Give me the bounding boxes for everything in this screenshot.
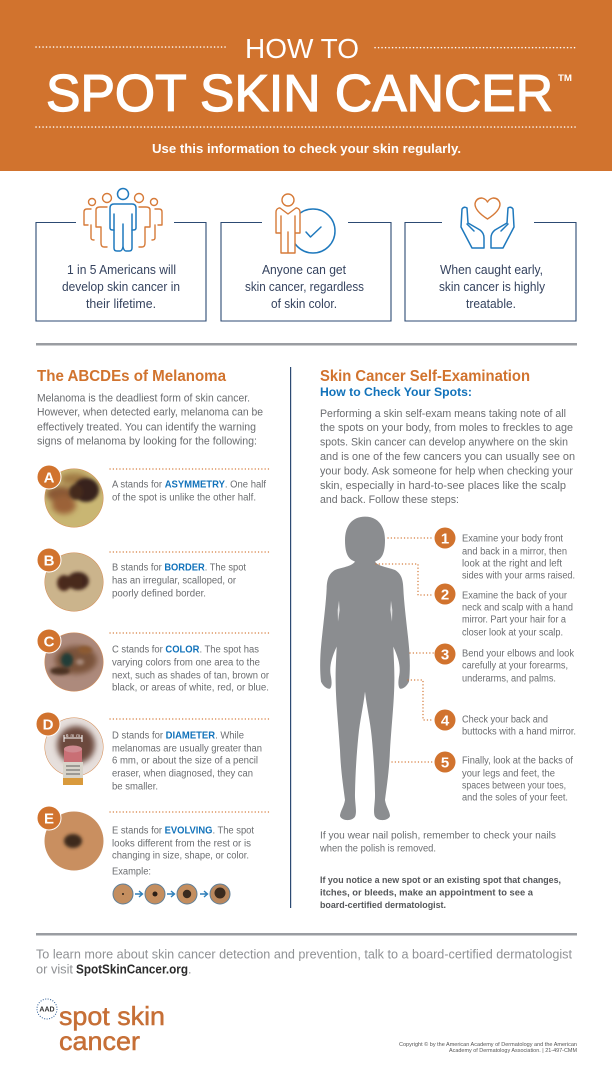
text: learn more: or visit [36,962,74,976]
step 5 [434,752,573,804]
text: stat: their lifetime. [86,297,156,311]
item: E evolving: Example: [112,866,151,878]
badge A [37,465,61,489]
logo: spot skin cancer: spot skin [59,1001,165,1031]
text: evolving: E stands for EVOLVING. The spot [112,826,254,836]
icon: AAD seal: AAD [39,1006,55,1014]
text: nail polish note [319,830,556,854]
photo: mole with pencil eraser: 6mm [66,733,80,738]
badge 1 [434,528,456,548]
text: see a dermatologist: itches, or bleeds, make an appointment to see a [320,888,534,898]
text: stat [62,263,180,311]
step 2: neck and scalp with a hand [462,602,573,614]
item: E evolving [37,806,270,904]
item: D diameter: be smaller. [112,782,158,792]
evolution sequence [113,884,230,904]
text: learn more [36,948,573,976]
figure: body silhouette [320,517,410,820]
step 3: underarms, and palms. [462,674,556,684]
item: E evolving: looks different from the rest or is [112,838,251,850]
text: self-exam intro: the spots on your body, from moles to freckles to age [320,422,573,434]
text: self-exam intro: and is one of the few cancers you can usually see on [320,451,575,463]
item: D diameter: eraser, when diagnosed, they can [112,768,253,780]
step 4: Check your back and [462,714,548,726]
item: C color: black, or areas of white, red, or blue. [112,682,269,694]
step 5: Finally, look at the backs of [462,756,573,766]
text: melanoma intro: effectively treated. You can identify the warning [37,422,256,434]
title: spot skin cancer: SPOT SKIN CANCER [46,65,553,123]
badge D: D [43,716,54,734]
badge 4: 4 [441,712,450,730]
badge 3: 3 [441,646,449,664]
text: nail polish note: when the polish is removed. [319,844,436,854]
text: learn more: . [188,962,191,976]
step 1 [434,528,575,582]
text: treatable [439,263,546,311]
text: learn more: To learn more about skin cancer detection and prevention, talk to a board-certified dermatologist [36,948,573,962]
text: treatable: When caught early, [440,263,543,277]
step 2: closer look at your scalp. [462,628,563,638]
heading: ABCDEs of Melanoma: The ABCDEs of Melanoma [37,368,226,385]
text: copyright: Copyright © by the American Academy of Dermatology and the American [399,1041,577,1048]
photo: mole with pencil eraser [44,717,104,785]
text: treatable: treatable. [466,297,516,311]
text: self-exam intro: skin, especially in hard-to-see places like the scalp [320,480,566,492]
text: see a dermatologist: If you notice a new spot or an existing spot that changes, [320,875,561,885]
heading: self-examination: Skin Cancer Self-Examination [320,368,530,385]
icon: person with check circle [276,194,335,253]
text: copyright [399,1041,577,1054]
subtitle: Use this information to check your skin regularly. [152,142,461,156]
item: B border: has an irregular, scalloped, or [112,576,237,586]
step 1: Examine your body front [462,534,563,544]
step 5: your legs and feet, the [462,768,555,780]
step 1: and back in a mirror, then [462,546,567,558]
item: C color: varying colors from one area to the [112,658,260,668]
step 2: mirror. Part your hair for a [462,614,566,626]
text: stat: 1 in 5 Americans will [67,263,176,277]
panel: anyone can get skin cancer [221,194,391,321]
step 2 [434,584,573,638]
text: statement [245,263,364,311]
text: stat: develop skin cancer in [62,280,180,294]
item: D diameter: melanomas are usually greater than [112,744,262,754]
step 3 [434,644,575,684]
item: D diameter: 6 mm, or about the size of a pencil [112,756,258,766]
badge 4 [434,710,456,730]
photo: irregular border mole [44,552,104,612]
step 1: sides with your arms raised. [462,570,575,582]
item: E evolving: changing in size, shape, or color. [112,850,249,862]
item: A asymmetry: of the spot is unlike the other half. [112,492,256,504]
step 3: Bend your elbows and look [462,648,575,660]
item: A asymmetry [37,465,270,528]
trademark: TM [558,73,572,83]
text: nail polish note: If you wear nail polish, remember to check your nails [320,830,556,842]
badge B [37,548,61,572]
text: color: C stands for COLOR. The spot has [112,644,259,656]
text: asymmetry: A stands for ASYMMETRY. One half [112,480,266,490]
step 4 [434,710,576,738]
step 5: and the soles of your feet. [462,792,568,804]
subheading: how to check: How to Check Your Spots: [320,385,472,399]
item: B border [37,548,270,612]
badge E: E [44,810,54,828]
text: treatable: skin cancer is highly [439,280,546,294]
badge B: B [44,552,55,570]
text: statement: of skin color. [271,297,337,311]
photo: asymmetrical mole [44,468,104,528]
badge 1: 1 [441,530,449,548]
badge A: A [44,470,55,486]
text: see a dermatologist [320,875,561,910]
text: diameter: D stands for DIAMETER. While [112,730,244,742]
header banner [0,0,612,171]
step 1: look at the right and left [462,558,562,570]
title: how to: HOW TO [245,33,359,64]
text: melanoma intro: However, when detected early, melanoma can be [37,406,263,418]
item: D diameter [36,712,270,792]
text: melanoma intro: Melanoma is the deadliest form of skin cancer. [37,392,250,404]
badge 2: 2 [441,586,449,604]
item: C color [37,629,270,694]
text: melanoma intro [37,392,263,448]
badge 5: 5 [441,754,449,772]
photo: multicolor mole [44,632,104,692]
text: copyright: Academy of Dermatology Association. | 21-497-CMM [449,1048,577,1054]
text: statement: skin cancer, regardless [245,280,364,294]
badge C: C [44,634,55,650]
logo: spot skin cancer [37,999,165,1056]
badge D [36,712,60,736]
step 5: spaces between your toes, [462,780,566,792]
text: self-exam intro [320,408,575,506]
badge C [37,629,61,653]
text: self-exam intro: Performing a skin self-exam means taking note of all [320,408,566,420]
logo: spot skin cancer: cancer [59,1026,140,1056]
text: melanoma intro: signs of melanoma by looking for the following: [37,436,257,448]
text: statement: Anyone can get [262,263,347,277]
badge 3 [434,644,456,664]
item: B border: poorly defined border. [112,588,206,600]
text: self-exam intro: your body. Ask someone for help when checking your [320,466,573,478]
text: border: B stands for BORDER. The spot [112,562,246,574]
panel: caught early [405,198,576,321]
text: learn more: SpotSkinCancer.org [76,962,188,976]
icon: group of people [84,188,162,251]
icon: hands holding heart [461,198,514,248]
text: self-exam intro: and back. Follow these steps: [320,494,459,506]
text: self-exam intro: spots. Skin cancer can develop anywhere on the skin [320,436,568,448]
text: see a dermatologist: board-certified dermatologist. [320,900,446,910]
item: C color: next, such as shades of tan, brown or [112,670,270,682]
panel: 1 in 5 Americans [36,188,206,321]
step 3: carefully at your forearms, [462,660,568,672]
step 4: buttocks with a hand mirror. [462,726,576,738]
step 2: Examine the back of your [462,590,568,602]
badge E [37,806,61,830]
photo: evolving mole [44,812,104,870]
